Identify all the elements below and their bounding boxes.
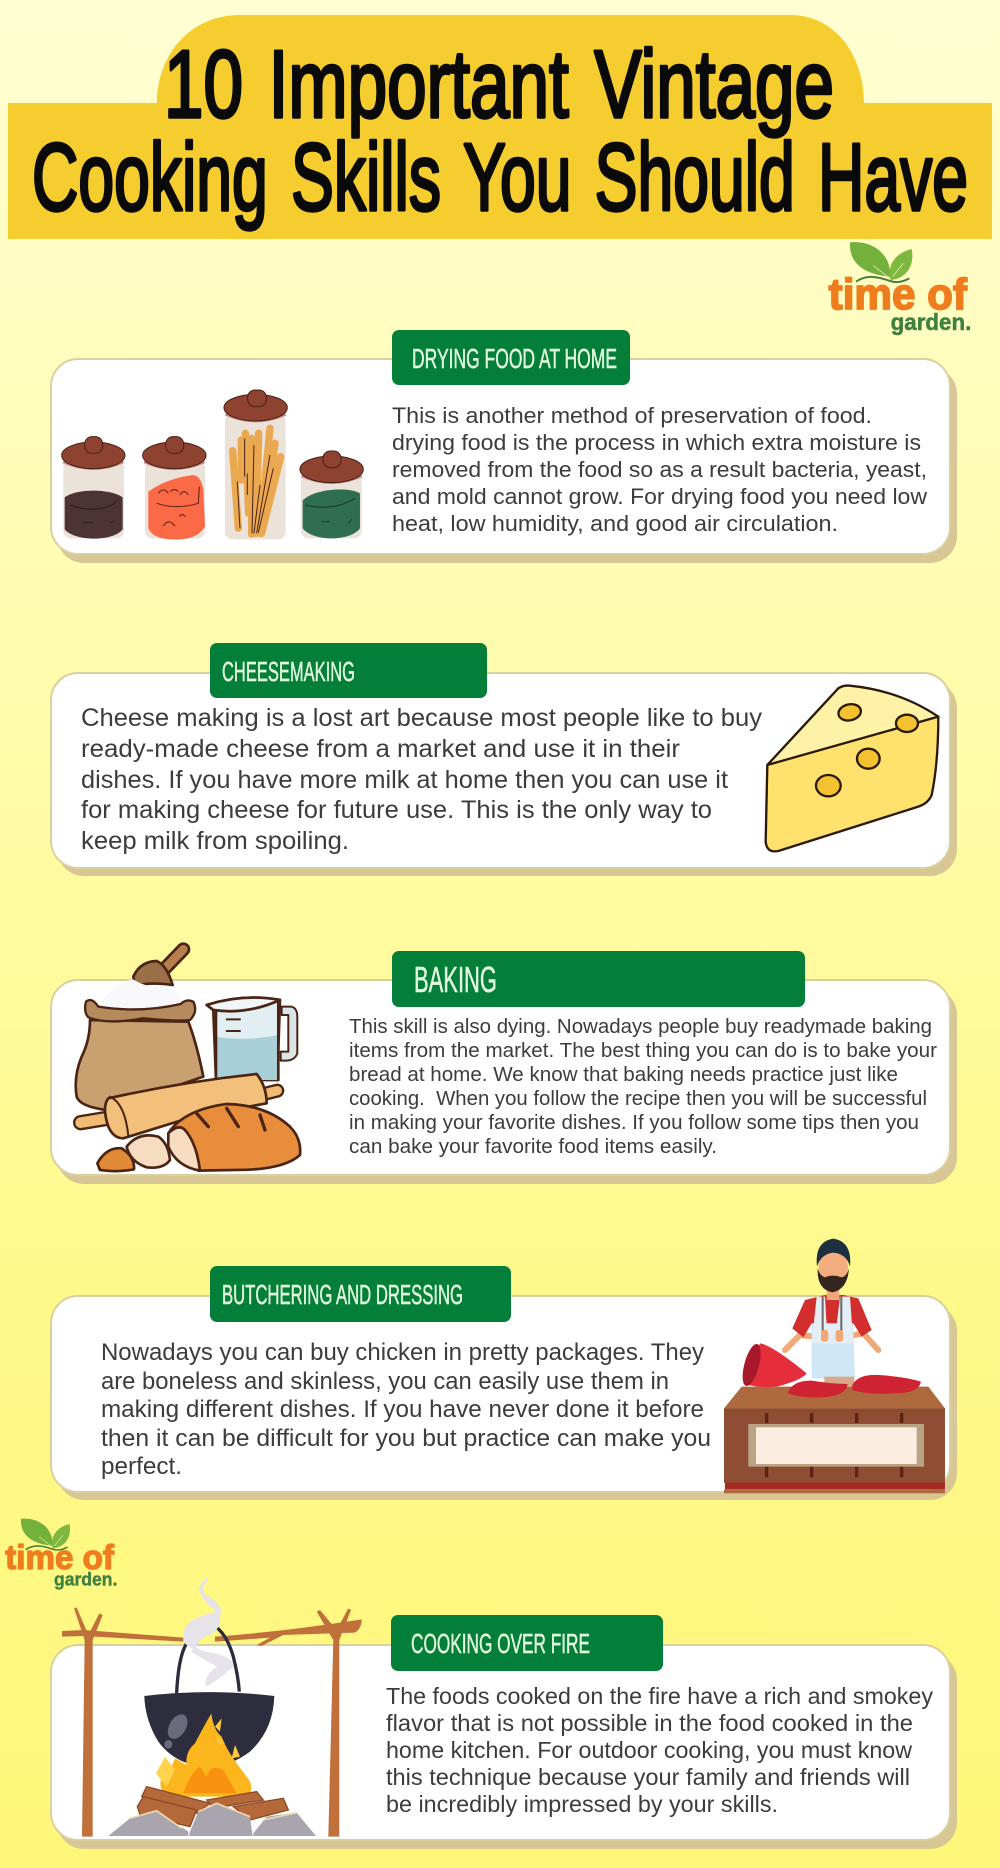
heading tag: drying food: DRYING FOOD AT HOME <box>412 343 617 374</box>
icon: butcher at counter <box>724 1239 945 1493</box>
text block: butchering: making different dishes. If you have never done it before <box>101 1396 704 1423</box>
logo: time of garden left: garden. <box>54 1569 117 1590</box>
icon: cheese wedge <box>766 686 938 851</box>
jug <box>207 998 280 1080</box>
text block: drying food: drying food is the process in which extra moisture is <box>392 430 921 455</box>
logo: time of garden top right: garden. <box>891 309 971 335</box>
panel: cheesemaking <box>51 643 957 876</box>
logs <box>137 1787 288 1827</box>
flames <box>160 1713 251 1797</box>
text block: cooking over fire: home kitchen. For outdoor cooking, you must know <box>386 1737 912 1763</box>
text block: baking: can bake your favorite food items easily. <box>349 1135 717 1158</box>
text block: butchering: are boneless and skinless, you can easily use them in <box>101 1368 669 1395</box>
heading tag: cheesemaking <box>210 643 487 698</box>
text block: baking <box>349 1015 937 1158</box>
text block: cooking over fire: be incredibly impressed by your skills. <box>386 1791 778 1817</box>
text block: butchering: perfect. <box>101 1453 182 1480</box>
heading tag: baking <box>392 951 805 1007</box>
heading tag: baking: BAKING <box>414 959 497 1000</box>
icon: flour sack, jug, rolling pin and bread <box>76 949 300 1171</box>
text block: drying food: removed from the food so as a result bacteria, yeast, <box>392 457 927 482</box>
heading tag: cheesemaking: CHEESEMAKING <box>222 656 355 687</box>
counter <box>724 1387 945 1493</box>
text block: drying food: and mold cannot grow. For drying food you need low <box>392 484 928 509</box>
heading tag: butchering: BUTCHERING AND DRESSING <box>222 1279 463 1310</box>
text block: cooking over fire: this technique because your family and friends will <box>386 1764 910 1790</box>
text block: drying food <box>392 403 928 536</box>
sack rim <box>85 1000 195 1021</box>
text block: cheesemaking: dishes. If you have more milk at home then you can use it <box>81 766 728 794</box>
heading tag: cooking over fire <box>391 1615 663 1671</box>
text block: drying food: This is another method of preservation of food. <box>392 403 872 428</box>
panel: baking <box>51 949 957 1184</box>
title banner <box>8 15 992 239</box>
text block: butchering: Nowadays you can buy chicken in pretty packages. They <box>101 1339 704 1366</box>
pot handle <box>177 1625 239 1693</box>
rocks <box>108 1803 316 1836</box>
icon: jars <box>62 390 363 539</box>
text block: baking: This skill is also dying. Nowadays people buy readymade baking <box>349 1015 932 1038</box>
text block: baking: bread at home. We know that baking needs practice just like <box>349 1063 898 1086</box>
logo: time of garden left: time of <box>5 1539 115 1577</box>
text block: butchering <box>101 1339 711 1480</box>
heading tag: cooking over fire: COOKING OVER FIRE <box>411 1628 590 1659</box>
title text <box>32 31 968 231</box>
icon: pot over campfire <box>62 1579 362 1837</box>
text block: cheesemaking: keep milk from spoiling. <box>81 827 349 855</box>
text block: cheesemaking: for making cheese for future use. This is the only way to <box>81 796 712 824</box>
logo: time of garden top right: time of <box>829 271 968 319</box>
panel: butchering and dressing <box>51 1239 957 1500</box>
text block: cooking over fire: flavor that is not possible in the food cooked in the <box>386 1710 913 1736</box>
text block: cooking over fire <box>386 1683 933 1817</box>
text block: butchering: then it can be difficult for you but practice can make you <box>101 1425 711 1452</box>
heading tag: drying food <box>392 330 630 385</box>
text block: baking: in making your favorite dishes. If you follow some tips then you <box>349 1111 919 1134</box>
flour <box>98 979 181 1010</box>
logo: time of garden top right <box>829 242 971 335</box>
bread <box>168 1104 300 1171</box>
text block: cheesemaking <box>81 704 763 855</box>
panel: cooking over fire <box>51 1579 957 1849</box>
cutting board <box>824 1377 854 1387</box>
steam <box>185 1579 232 1685</box>
pot <box>144 1692 274 1767</box>
logo: time of garden left <box>5 1519 117 1590</box>
rolling pin <box>81 1117 113 1123</box>
panel: drying food at home <box>51 330 957 563</box>
butcher <box>785 1239 878 1378</box>
text block: cooking over fire: The foods cooked on the fire have a rich and smokey <box>386 1683 933 1709</box>
text block: drying food: heat, low humidity, and good air circulation. <box>392 511 838 536</box>
text block: cheesemaking: ready-made cheese from a market and use it in their <box>81 735 680 763</box>
wooden frame <box>62 1607 362 1837</box>
meat <box>739 1342 921 1397</box>
text block: cheesemaking: Cheese making is a lost art because most people like to buy <box>81 704 763 732</box>
heading tag: butchering <box>210 1266 511 1322</box>
sack body <box>76 1020 203 1110</box>
text block: baking: cooking. When you follow the recipe then you will be successful <box>349 1087 927 1110</box>
scoop <box>133 949 183 986</box>
text block: baking: items from the market. The best thing you can do is to bake your <box>349 1039 937 1062</box>
